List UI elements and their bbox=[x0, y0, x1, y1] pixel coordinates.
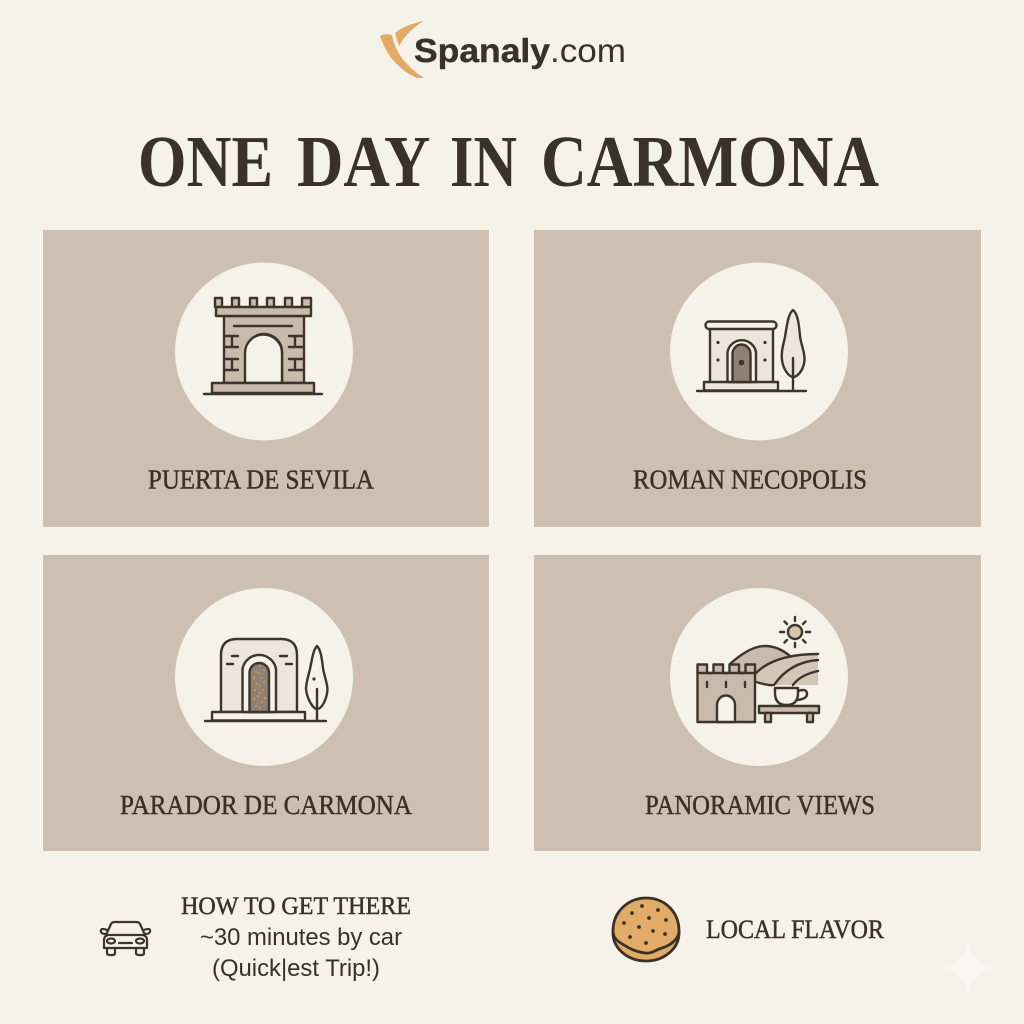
text: local flavor: LOCAL FLAVOR bbox=[706, 915, 885, 944]
icon: coffee cup and table bbox=[759, 688, 819, 722]
title: ONE bbox=[138, 121, 273, 202]
panel: Parador de Carmona bbox=[43, 555, 489, 851]
panel: Panoramic Views bbox=[534, 555, 981, 851]
label: PUERTA DE SEVILA bbox=[148, 464, 374, 494]
icon: sun bbox=[780, 617, 810, 647]
label: ROMAN NECOPOLIS bbox=[633, 464, 867, 494]
icon: castle bbox=[698, 664, 755, 722]
text: how to get there: (Quick|est Trip!) bbox=[212, 955, 380, 982]
icon: orange logo mark bbox=[380, 21, 424, 78]
icon: castle, hills, sun and coffee bbox=[698, 617, 819, 722]
icon: sparkle bbox=[944, 944, 992, 992]
text: how to get there: ~30 minutes by car bbox=[200, 924, 402, 951]
icon: tomb and cypress bbox=[697, 310, 806, 391]
title: CARMONA bbox=[541, 121, 879, 202]
icon: cookie bbox=[613, 898, 679, 961]
text: how to get there: HOW TO GET THERE bbox=[181, 893, 411, 920]
panel: Roman Necopolis bbox=[534, 230, 981, 527]
text: how to get there bbox=[181, 893, 411, 982]
label: PARADOR DE CARMONA bbox=[120, 790, 412, 820]
panel: Puerta de Sevila bbox=[43, 230, 489, 527]
logo wordmark: .com bbox=[550, 32, 626, 69]
title: DAY bbox=[297, 121, 430, 202]
icon: hills bbox=[730, 646, 818, 685]
logo: Spanaly.com bbox=[380, 21, 626, 78]
title: IN bbox=[450, 121, 517, 202]
icon: parador archway and cypress bbox=[205, 639, 328, 721]
icon: car bbox=[101, 922, 150, 955]
label: PANORAMIC VIEWS bbox=[645, 790, 875, 820]
logo wordmark: Spanaly bbox=[414, 32, 551, 69]
icon: fortified gate bbox=[204, 298, 322, 394]
